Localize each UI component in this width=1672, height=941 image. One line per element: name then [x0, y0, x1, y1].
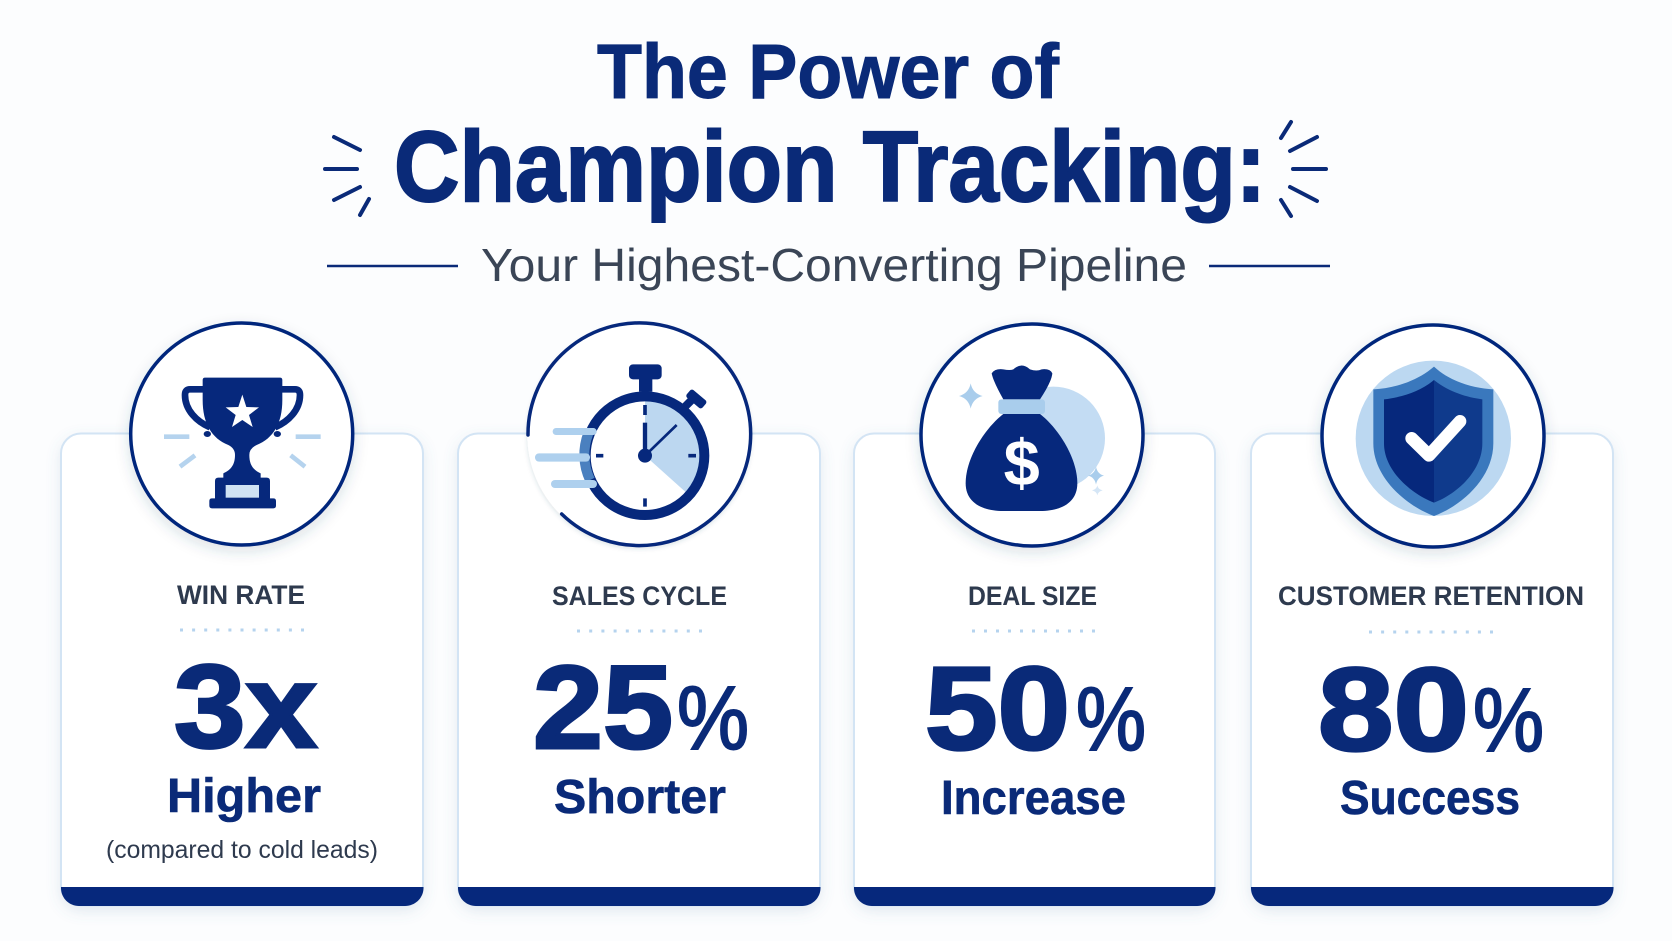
dotted divider	[972, 630, 1095, 632]
metric: 25	[533, 642, 673, 774]
title	[394, 29, 1266, 223]
card body	[1251, 434, 1614, 906]
icon: shield	[1322, 325, 1544, 547]
metric	[533, 642, 749, 774]
panel: win rate	[61, 323, 424, 906]
card body	[61, 434, 424, 906]
label: DEAL SIZE	[968, 581, 1097, 611]
card body	[854, 434, 1216, 906]
metric: %	[1076, 670, 1146, 770]
icon: stopwatch	[527, 323, 751, 547]
metric: %	[1473, 671, 1544, 771]
metric caption: Shorter	[554, 771, 726, 824]
label: CUSTOMER RETENTION	[1278, 581, 1584, 611]
dotted divider	[577, 630, 702, 632]
metric caption: Success	[1340, 772, 1520, 825]
metric caption: Higher	[167, 770, 321, 823]
icon: money bag	[921, 324, 1143, 546]
panel: customer retention	[1251, 325, 1614, 906]
metric caption: Increase	[941, 772, 1126, 825]
metric: 80	[1318, 644, 1469, 776]
icon: left sparkle rays	[325, 137, 369, 215]
metric: %	[677, 669, 749, 769]
icon: right sparkle rays	[1281, 122, 1326, 216]
icon: trophy	[131, 323, 353, 545]
metric: 50	[925, 643, 1070, 775]
note: (compared to cold leads)	[106, 836, 378, 864]
title line 2: Champion Tracking:	[394, 111, 1266, 223]
metric	[1318, 644, 1544, 776]
panel: deal size	[854, 324, 1216, 906]
dotted divider	[180, 628, 304, 632]
label: SALES CYCLE	[552, 581, 727, 611]
metric: 3x	[174, 641, 317, 773]
panel: sales cycle	[458, 323, 820, 906]
title line 1: The Power of	[597, 29, 1059, 115]
subtitle: Your Highest-Converting Pipeline	[481, 239, 1187, 291]
card body	[458, 434, 820, 906]
icon: money bag: $	[1004, 426, 1040, 499]
metric	[925, 643, 1146, 775]
dotted divider	[1369, 630, 1493, 634]
label: WIN RATE	[177, 580, 305, 610]
